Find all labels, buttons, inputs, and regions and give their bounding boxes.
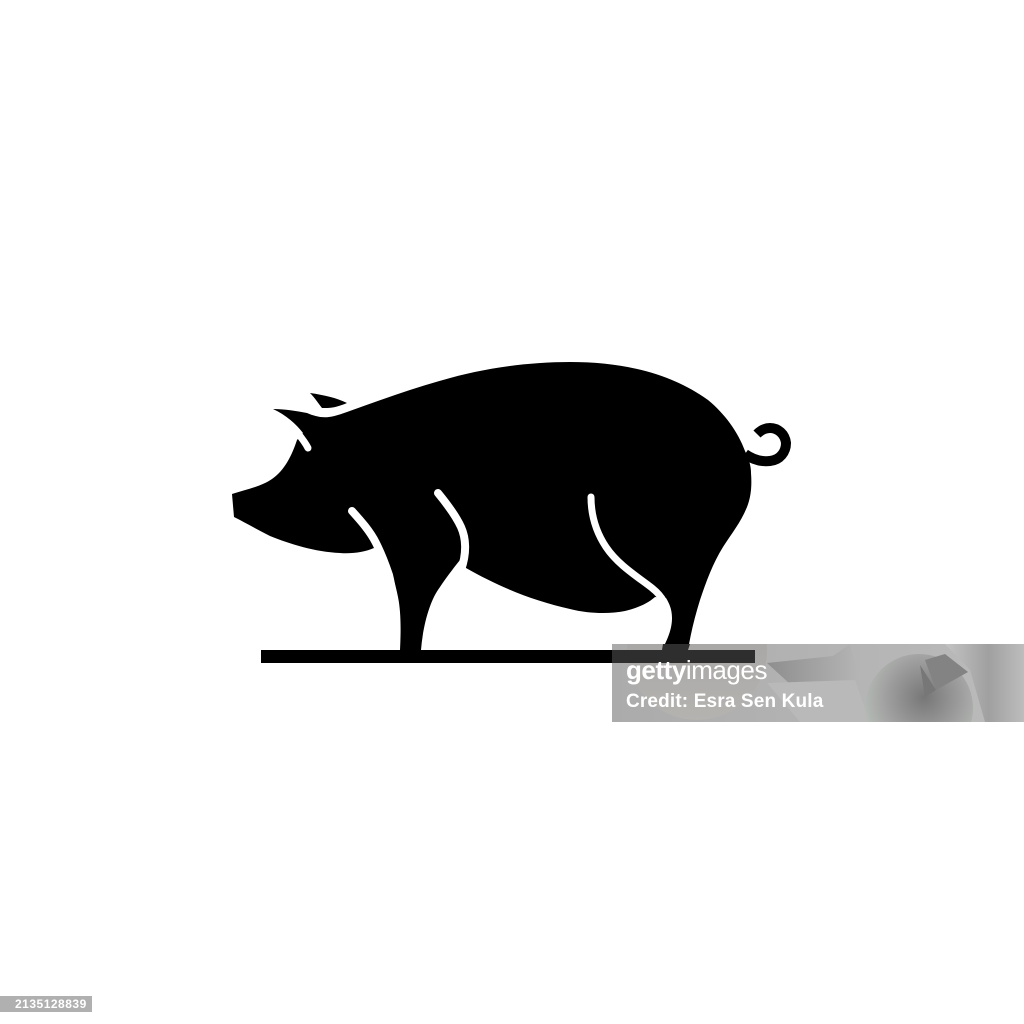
ground line bbox=[261, 650, 755, 663]
image id label bbox=[0, 996, 92, 1012]
chest line bbox=[438, 493, 465, 570]
pig illustration bbox=[232, 362, 786, 663]
hind leg line bbox=[591, 497, 664, 602]
icon: pig body silhouette bbox=[232, 362, 751, 650]
watermark credit: Credit: Esra Sen Kula bbox=[626, 691, 824, 712]
banner background bbox=[612, 644, 1024, 722]
watermark overlay on black artwork bbox=[612, 644, 755, 663]
icon: pig ear bbox=[310, 393, 347, 408]
watermark logo text: gettyimages bbox=[626, 655, 767, 685]
front leg line bbox=[352, 511, 393, 598]
watermark banner bbox=[612, 644, 1024, 722]
eye and ear line bbox=[296, 431, 308, 448]
image id label: 2135128839 bbox=[15, 997, 87, 1011]
icon: curly tail bbox=[745, 428, 786, 461]
